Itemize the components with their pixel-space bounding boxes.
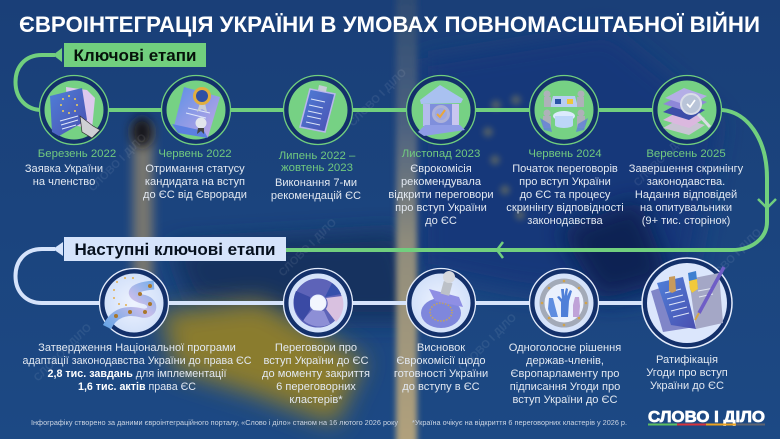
date: Березень 2022: [38, 148, 116, 160]
description: 2,8 тис. завдань для імплементації: [48, 368, 226, 380]
description: [22, 342, 252, 393]
description: адаптації законодавства України до права ЄС: [22, 355, 252, 367]
title: ЄВРОІНТЕГРАЦІЯ УКРАЇНИ В УМОВАХ ПОВНОМАСШТАБНОЇ ВІЙНИ: [19, 12, 760, 37]
description: Єврокомісії щодо: [396, 355, 486, 367]
icon: institution building: [406, 76, 476, 144]
date: Червень 2024: [528, 148, 602, 160]
icon: certificate scroll: [162, 76, 230, 144]
description: до вступу в ЄС: [402, 381, 480, 393]
watermarks: [32, 66, 764, 384]
stage 4: commission recommendation: [388, 76, 494, 227]
watermarks: СЛОВО І ДІЛО: [32, 321, 94, 384]
description: Переговори про: [275, 342, 357, 354]
heading: Наступні ключові етапи: [53, 237, 286, 261]
stage 6: screening completed: [629, 76, 744, 227]
description: відкрити переговори: [388, 189, 494, 201]
stage 5: negotiations: [506, 76, 624, 227]
description: Виконання 7-ми: [275, 177, 357, 189]
description: кластерів*: [289, 394, 343, 406]
date: Листопад 2023: [402, 148, 480, 160]
heading: Ключові етапи: Ключові етапи: [74, 47, 196, 65]
stage 3: recommendations: [271, 76, 361, 202]
stage 2: candidate status: [143, 76, 247, 201]
light timeline: [16, 249, 650, 303]
heading: Ключові етапи: [64, 43, 206, 67]
description: Затвердження Національної програми: [38, 342, 236, 354]
footnote: clusters: *Україна очікує на відкриття 6 переговорних кластерів у 2026 р.: [412, 418, 627, 427]
description: Надання відповідей: [635, 189, 737, 201]
description: Отримання статусу: [145, 163, 245, 175]
description: рекомендувала: [401, 176, 482, 188]
description: рекомендацій ЄС: [271, 190, 361, 202]
icon: winding road with EU stars: [100, 268, 168, 338]
watermarks: СЛОВО І ДІЛО: [632, 126, 694, 189]
next stage 4: unanimous decision: [509, 268, 621, 406]
description: Початок переговорів: [512, 163, 618, 175]
green timeline with arrows: [16, 48, 776, 258]
description: на членство: [33, 176, 95, 188]
description: Ратифікація: [656, 354, 718, 366]
description: Висновок: [417, 342, 465, 354]
description: Єврокомісія: [410, 163, 472, 175]
date: Липень 2022 –: [279, 150, 355, 162]
description: на опитувальники: [640, 202, 732, 214]
description: вступ України до ЄС: [512, 394, 618, 406]
description: до ЄС: [425, 215, 457, 227]
description: готовності України: [394, 368, 488, 380]
date: Червень 2022: [158, 148, 232, 160]
icon: negotiators at a round table: [530, 76, 598, 144]
description: України до ЄС: [650, 380, 724, 392]
icon: documents with EU flag and cursor: [40, 76, 108, 144]
icon: stamp with seal: [406, 268, 476, 338]
description: (9+ тис. сторінок): [642, 215, 730, 227]
watermarks: СЛОВО І ДІЛО: [702, 226, 764, 289]
next stage 5: ratification: [642, 258, 732, 392]
icon: clipboard checklist: [284, 76, 352, 144]
icon: open book with Ukrainian bookmark and pen: [642, 258, 732, 348]
watermarks: СЛОВО І ДІЛО: [87, 131, 149, 194]
description: про вступ України: [519, 176, 611, 188]
icon: raised hands in a ring of stars: [530, 268, 598, 338]
next stage 1: national programme: [22, 268, 252, 393]
description: до ЄС від Євроради: [143, 189, 247, 201]
watermarks: СЛОВО І ДІЛО: [347, 66, 409, 129]
stage 1: application: [25, 76, 116, 188]
description: держав-членів,: [526, 355, 604, 367]
description: Європарламенту про: [511, 368, 619, 380]
icon: stack of papers with magnifier: [652, 76, 722, 144]
description: законодавства.: [647, 176, 725, 188]
footnote: source: Інфографіку створено за даними євроінтеграційного порталу, «Слово і діло» станом на 16 лютого 2026 року: [31, 418, 398, 427]
description: Одноголосне рішення: [509, 342, 621, 354]
icon: puzzle ring of six pieces: [284, 268, 352, 338]
description: 6 переговорних: [276, 381, 356, 393]
next stage 3: commission conclusion: [394, 268, 488, 393]
heading: Наступні ключові етапи: Наступні ключові етапи: [74, 241, 276, 259]
description: вступ України до ЄС: [263, 355, 369, 367]
date: Вересень 2025: [646, 148, 726, 160]
description: про вступ України: [395, 202, 487, 214]
description: кандидата на вступ: [145, 176, 245, 188]
watermarks: СЛОВО І ДІЛО: [457, 311, 519, 374]
description: 1,6 тис. актів права ЄС: [78, 381, 196, 393]
logo: Слово і діло: СЛОВО І ДІЛО: [648, 409, 765, 426]
description: підписання Угоди про: [510, 381, 620, 393]
date: жовтень 2023: [281, 162, 353, 174]
description: законодавства: [527, 215, 604, 227]
description: до моменту закриття: [262, 368, 370, 380]
description: скринінгу відповідності: [506, 202, 624, 214]
watermarks: СЛОВО І ДІЛО: [277, 216, 339, 279]
description: Угоди про вступ: [646, 367, 728, 379]
description: Завершення скринінгу: [629, 163, 743, 175]
description: Заявка України: [25, 163, 103, 175]
next stage 2: clusters: [262, 268, 370, 406]
description: до ЄС та процесу: [520, 189, 611, 201]
